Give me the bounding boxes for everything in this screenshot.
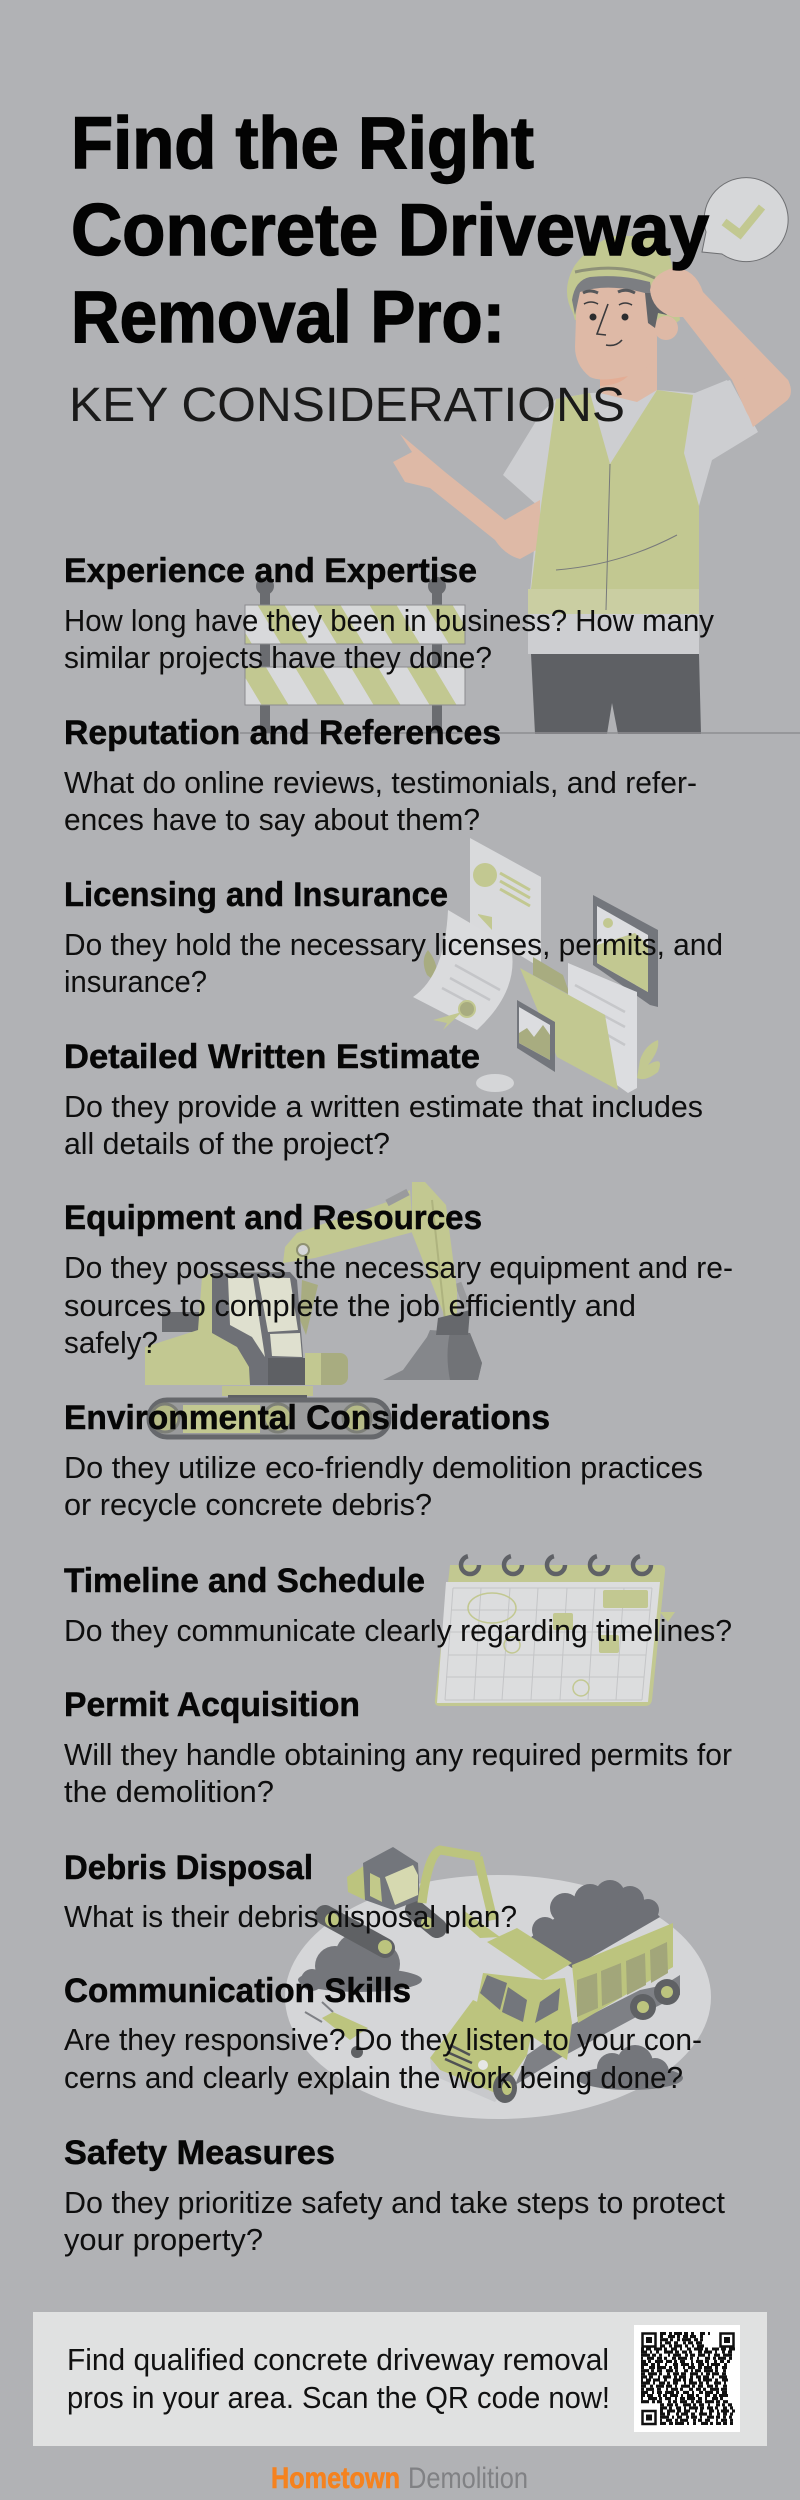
section: reputation and references: Reputation and References: [64, 714, 501, 752]
section: environmental considerations: Do they utilize eco-friendly demolition practices: [64, 1450, 703, 1485]
section: experience and expertise: How long have they been in business? How many: [64, 603, 714, 638]
mini excavator: [325, 1847, 500, 1954]
illustration: wall calendar: [435, 1556, 675, 1706]
section: safety measures: [64, 2134, 725, 2257]
section: timeline and schedule: Timeline and Schedule: [64, 1562, 425, 1600]
section: licensing and insurance: Do they hold the necessary licenses, permits, and: [64, 927, 723, 962]
section: equipment and resources: [64, 1199, 733, 1360]
section: experience and expertise: [64, 552, 714, 675]
title: Find the Right: [71, 103, 534, 184]
section: debris disposal: [64, 1849, 517, 1934]
QR code: [634, 2325, 740, 2432]
section: detailed written estimate: Detailed Written Estimate: [64, 1038, 480, 1076]
logo: Hometown Demolition: [271, 2462, 528, 2495]
section: communication skills: [64, 1972, 702, 2095]
section: reputation and references: What do online reviews, testimonials, and refer-: [64, 765, 697, 800]
section: detailed written estimate: Do they provide a written estimate that includes: [64, 1089, 703, 1124]
ground line: [240, 732, 800, 734]
callout: scan the QR code: [33, 2312, 767, 2446]
section: environmental considerations: or recycle concrete debris?: [64, 1487, 432, 1522]
callout: scan the QR code: Find qualified concrete driveway removal: [67, 2342, 609, 2377]
section: communication skills: Communication Skills: [64, 1972, 411, 2010]
section: reputation and references: [64, 714, 697, 837]
section: licensing and insurance: insurance?: [64, 964, 207, 999]
section: detailed written estimate: [64, 1038, 703, 1161]
icon: hard hat: [567, 236, 680, 335]
title: [71, 103, 709, 358]
section: debris disposal: What is their debris disposal plan?: [64, 1899, 517, 1934]
illustration: striped road barricade: [245, 577, 465, 733]
icon: check mark speech bubble: [702, 178, 788, 262]
section: permit acquisition: [64, 1686, 732, 1809]
section: permit acquisition: the demolition?: [64, 1774, 274, 1809]
callout: scan the QR code: pros in your area. Scan the QR code now!: [67, 2380, 610, 2415]
section: permit acquisition: Will they handle obtaining any required permits for: [64, 1737, 732, 1772]
section: safety measures: your property?: [64, 2222, 263, 2257]
section: communication skills: Are they responsive? Do they listen to your con-: [64, 2022, 702, 2057]
logo: Hometown Demolition: Demolition: [408, 2462, 528, 2495]
section: equipment and resources: sources to complete the job efficiently and: [64, 1288, 636, 1323]
section: environmental considerations: Environmental Considerations: [64, 1399, 550, 1437]
section: permit acquisition: Permit Acquisition: [64, 1686, 360, 1724]
subtitle: KEY CONSIDERATIONS: [69, 379, 625, 432]
section: experience and expertise: similar projects have they done?: [64, 640, 492, 675]
section: experience and expertise: Experience and Expertise: [64, 552, 477, 590]
section: licensing and insurance: Licensing and Insurance: [64, 876, 448, 914]
debris pile right: [577, 2045, 683, 2090]
logo: Hometown Demolition: Hometown: [271, 2462, 400, 2495]
illustration: construction worker: [393, 178, 791, 734]
section: equipment and resources: safely?: [64, 1325, 158, 1360]
debris pile left: [298, 1934, 422, 1992]
section: timeline and schedule: [64, 1562, 732, 1648]
section: equipment and resources: Equipment and Resources: [64, 1199, 482, 1237]
section: timeline and schedule: Do they communicate clearly regarding timelines?: [64, 1613, 732, 1648]
section: debris disposal: Debris Disposal: [64, 1849, 313, 1887]
title: Concrete Driveway: [71, 190, 709, 271]
illustration: excavator: [145, 1182, 482, 1437]
dump truck: [430, 1880, 680, 2103]
section: safety measures: Safety Measures: [64, 2134, 335, 2172]
section: equipment and resources: Do they possess the necessary equipment and re-: [64, 1250, 733, 1285]
section: reputation and references: ences have to say about them?: [64, 802, 480, 837]
section: detailed written estimate: all details of the project?: [64, 1126, 390, 1161]
section: communication skills: cerns and clearly explain the work being done?: [64, 2060, 683, 2095]
title: Removal Pro:: [71, 277, 505, 358]
illustration: documents and folder: [413, 838, 660, 1093]
section: environmental considerations: [64, 1399, 703, 1522]
illustration: excavator and dump truck hauling debris: [285, 1847, 711, 2119]
section: licensing and insurance: [64, 876, 723, 999]
wheelbarrow: [305, 2002, 368, 2058]
section: safety measures: Do they prioritize safety and take steps to protect: [64, 2185, 725, 2220]
